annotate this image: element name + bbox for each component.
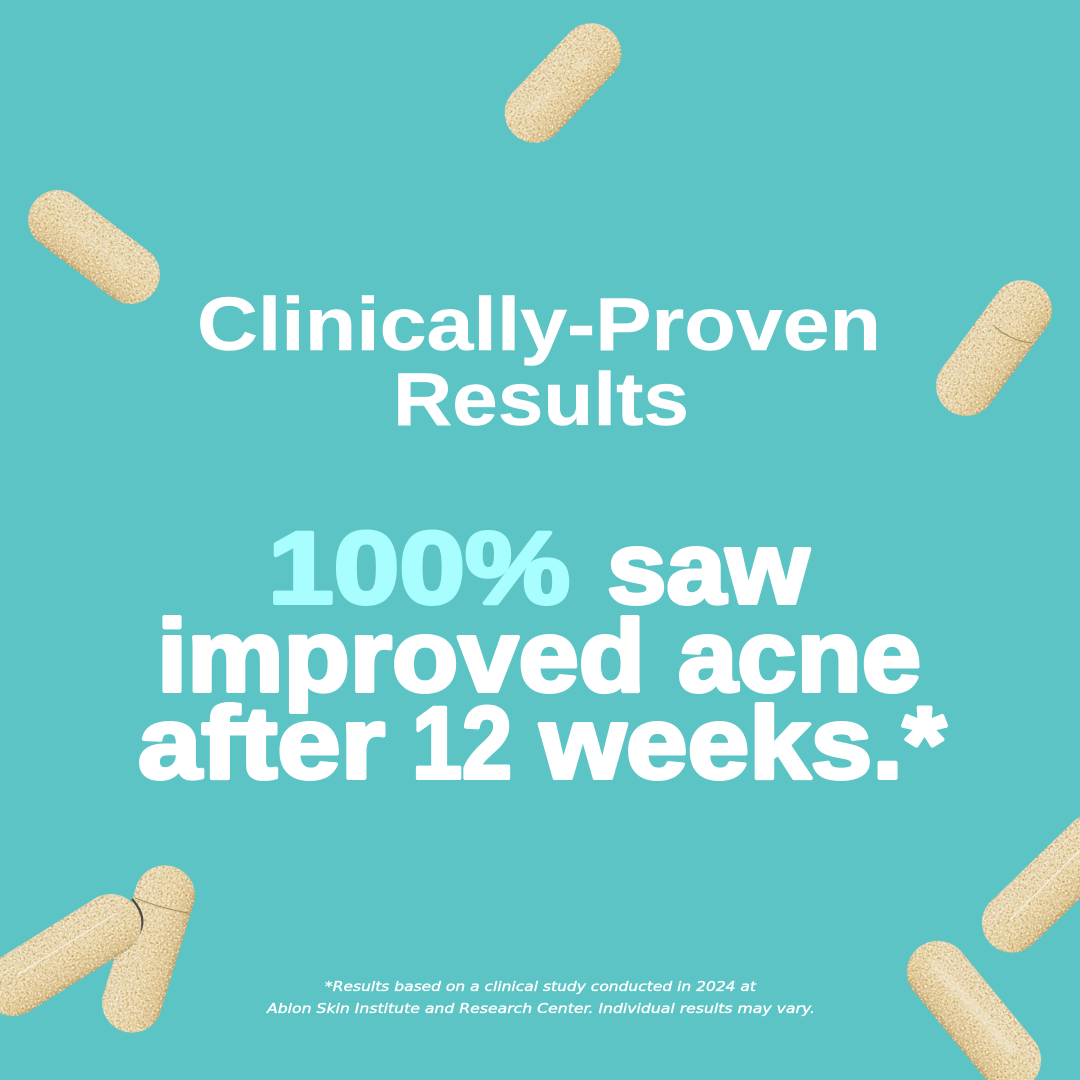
front capsule highlight	[17, 913, 117, 975]
contact shadow	[122, 899, 142, 949]
capsules: bottom left pair	[0, 858, 202, 1040]
main statement	[138, 511, 946, 800]
main statement: acne	[678, 599, 921, 713]
capsule: lower right upper	[970, 801, 1080, 965]
back capsule seam	[135, 898, 188, 913]
highlighted figure: 100%	[268, 511, 570, 625]
capsule: upper left	[16, 178, 172, 316]
capsule: lower right lower	[894, 928, 1054, 1080]
heading: Clinically-Proven	[197, 282, 881, 366]
capsule highlight	[935, 965, 1012, 1050]
front capsule	[0, 883, 153, 1027]
line two: improved	[157, 599, 645, 713]
capsule seam	[993, 325, 1032, 343]
line one remainder: saw	[607, 511, 810, 625]
capsule highlight	[1010, 850, 1080, 920]
heading: Results	[393, 357, 689, 441]
heading	[197, 282, 881, 441]
footnote: *Results based on a clinical study conducted in 2024 at	[325, 980, 757, 995]
line three: after	[138, 686, 385, 800]
capsule: right	[924, 268, 1064, 428]
footnote	[266, 980, 815, 1017]
capsule: top	[492, 11, 634, 155]
main statement: 12	[412, 686, 512, 800]
back capsule	[95, 858, 202, 1040]
footnote: Ablon Skin Institute and Research Center. Individual results may vary.	[266, 1002, 815, 1017]
main statement: weeks.*	[539, 686, 946, 800]
